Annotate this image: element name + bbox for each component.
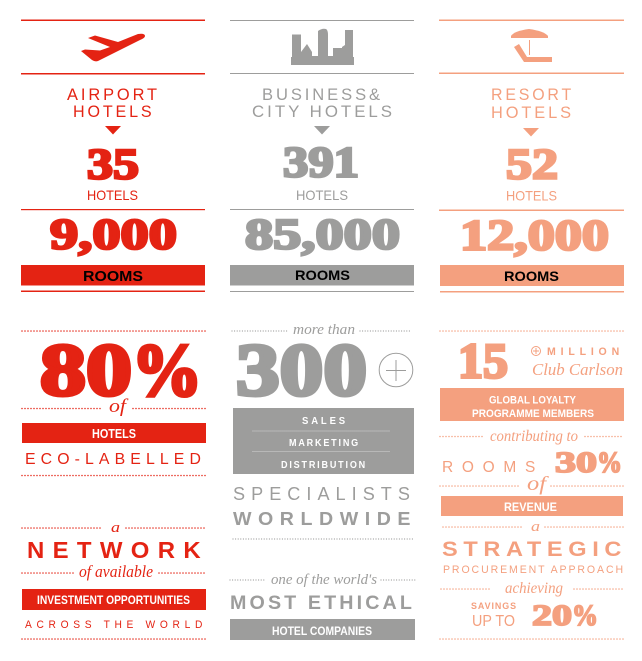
- panel: most ethical: [230, 572, 416, 640]
- script: a: a: [531, 519, 540, 535]
- heading: business and city hotels: CITY HOTELS: [252, 102, 395, 121]
- panel: resort hotels: [439, 20, 624, 292]
- bar: resort rooms: ROOMS: [504, 268, 559, 284]
- arrow: resort down triangle: [523, 128, 539, 136]
- panel: investment network: [22, 520, 209, 639]
- text: procurement approach: PROCUREMENT APPROACH: [443, 564, 625, 576]
- text: specialists: SPECIALISTS: [233, 484, 416, 504]
- heading: business and city hotels: [252, 85, 395, 121]
- arrow: airport down triangle: [105, 126, 121, 134]
- icon: city skyline: [291, 29, 354, 65]
- script: one of the world's: one of the world's: [271, 572, 377, 588]
- number: 80 percent: %: [132, 330, 202, 412]
- bar: global loyalty programme members: GLOBAL LOYALTY: [489, 394, 577, 406]
- arrow: business down triangle: [314, 126, 330, 134]
- label: airport hotels count: HOTELS: [87, 187, 138, 203]
- script: more than: more than: [293, 322, 355, 338]
- heading: resort hotels: [491, 85, 574, 122]
- text: worldwide: WORLDWIDE: [233, 509, 417, 529]
- script: achieving: achieving: [505, 580, 563, 597]
- number: 300: 300: [236, 330, 367, 412]
- bar: business rooms: [230, 265, 414, 286]
- text: savings: SAVINGS: [471, 601, 517, 612]
- bar: airport rooms: [21, 265, 205, 286]
- panel: strategic procurement: [440, 519, 627, 639]
- bar: airport rooms: ROOMS: [83, 269, 143, 285]
- number: 391 hotels: 391: [283, 140, 359, 187]
- box: sales marketing distribution: DISTRIBUTION: [281, 460, 367, 471]
- script: contributing to: contributing to: [490, 428, 578, 445]
- heading: resort hotels: HOTELS: [491, 103, 574, 122]
- number: 30 percent: 30: [555, 446, 597, 479]
- script: of available: of available: [79, 562, 153, 581]
- number: 20 percent: 20: [532, 599, 572, 632]
- script: a: a: [111, 520, 120, 536]
- bar: hotels: [22, 423, 206, 443]
- text: eco-labelled: ECO-LABELLED: [25, 451, 206, 468]
- heading: airport hotels: HOTELS: [73, 102, 154, 121]
- text: strategic: STRATEGIC: [442, 538, 627, 561]
- box: sales marketing distribution: MARKETING: [289, 438, 360, 449]
- label: resort hotels count: HOTELS: [506, 188, 557, 204]
- bar: revenue: [441, 496, 623, 516]
- panel: business and city hotels: [230, 20, 414, 292]
- number: 35 hotels: 35: [87, 142, 139, 189]
- script: of: of: [527, 473, 549, 495]
- icon: airplane: [81, 34, 145, 61]
- bar: global loyalty programme members: PROGRAMME MEMBERS: [472, 408, 594, 420]
- number: 12,000 rooms: 12,000: [460, 213, 609, 260]
- icon: plus in circle: [379, 353, 413, 387]
- icon: small plus in circle: [532, 346, 540, 356]
- bar: investment opportunities: INVESTMENT OPPORTUNITIES: [37, 595, 190, 607]
- bar: business rooms: ROOMS: [295, 267, 350, 283]
- text: rooms: ROOMS: [442, 459, 544, 476]
- number: 15: 15: [458, 332, 508, 388]
- icon: beach umbrella and lounger: [511, 29, 552, 62]
- number: 85,000 rooms: 85,000: [245, 212, 400, 259]
- script: of: of: [109, 396, 129, 417]
- heading: airport hotels: AIRPORT: [67, 85, 160, 104]
- number: 20 percent: %: [572, 599, 598, 632]
- panel: eco-labelled hotels: [22, 330, 206, 476]
- number: 80 percent: 80: [40, 330, 132, 412]
- heading: business and city hotels: BUSINESS&: [262, 85, 383, 104]
- bar: resort rooms: [440, 265, 624, 286]
- bar: hotel companies: HOTEL COMPANIES: [272, 624, 372, 638]
- panel: club carlson: [440, 331, 624, 516]
- label: business hotels count: HOTELS: [296, 187, 348, 203]
- text: across the world: ACROSS THE WORLD: [25, 619, 207, 631]
- bar: investment opportunities: [22, 589, 206, 610]
- text: million: MILLION: [547, 346, 624, 358]
- panel: specialists: [232, 322, 417, 539]
- number: 30 percent: %: [597, 446, 622, 479]
- bar: hotels: HOTELS: [92, 427, 136, 441]
- text: most ethical: MOST ETHICAL: [230, 593, 415, 614]
- box: sales marketing distribution: [233, 408, 414, 474]
- text: up to: UP TO: [472, 613, 515, 630]
- text: network: NETWORK: [27, 537, 209, 563]
- bar: revenue: REVENUE: [504, 500, 557, 514]
- number: 52 hotels: 52: [506, 142, 558, 189]
- bar: hotel companies: [230, 619, 415, 640]
- bar: global loyalty programme members: [440, 388, 624, 421]
- script: club carlson: Club Carlson: [532, 360, 623, 379]
- panel: airport hotels: [21, 20, 205, 292]
- box: sales marketing distribution: SALES: [302, 416, 348, 427]
- heading: airport hotels: [67, 85, 160, 121]
- heading: resort hotels: RESORT: [491, 85, 574, 104]
- number: 9,000 rooms: 9,000: [50, 212, 177, 259]
